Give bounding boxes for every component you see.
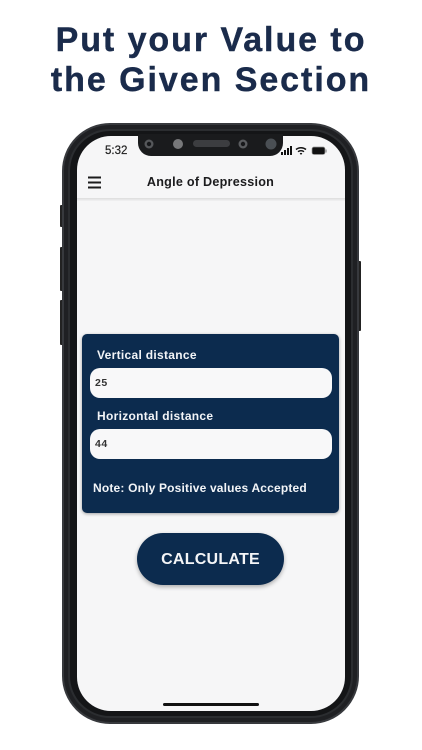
status icons: [281, 146, 327, 155]
title: [51, 21, 371, 98]
input: horizontal distance: [90, 429, 332, 459]
phone body: [62, 123, 359, 724]
status bar time: 5:32: [105, 145, 127, 157]
home indicator: [163, 703, 259, 706]
calculate button: CALCULATE: [161, 551, 260, 568]
input value 44: 44: [95, 438, 108, 450]
camera dots: [144, 138, 276, 150]
title: Put your Value to: [56, 21, 366, 59]
menu icon: [88, 176, 101, 188]
phone mockup: [60, 123, 361, 724]
screen heading: Angle of Depression: [147, 175, 274, 189]
screen: [77, 136, 345, 711]
note text: Note: Only Positive values Accepted: [93, 481, 307, 495]
app bar divider: [77, 198, 345, 201]
phone side buttons: [60, 205, 361, 345]
input: vertical distance: [90, 368, 332, 398]
input value 25: 25: [95, 376, 108, 388]
title: the Given Section: [51, 60, 371, 98]
notch: [138, 134, 283, 156]
calculate button: [137, 533, 284, 585]
label: horizontal distance: Horizontal distance: [97, 409, 213, 423]
input panel: [82, 334, 339, 513]
label: vertical distance: Vertical distance: [97, 348, 197, 362]
